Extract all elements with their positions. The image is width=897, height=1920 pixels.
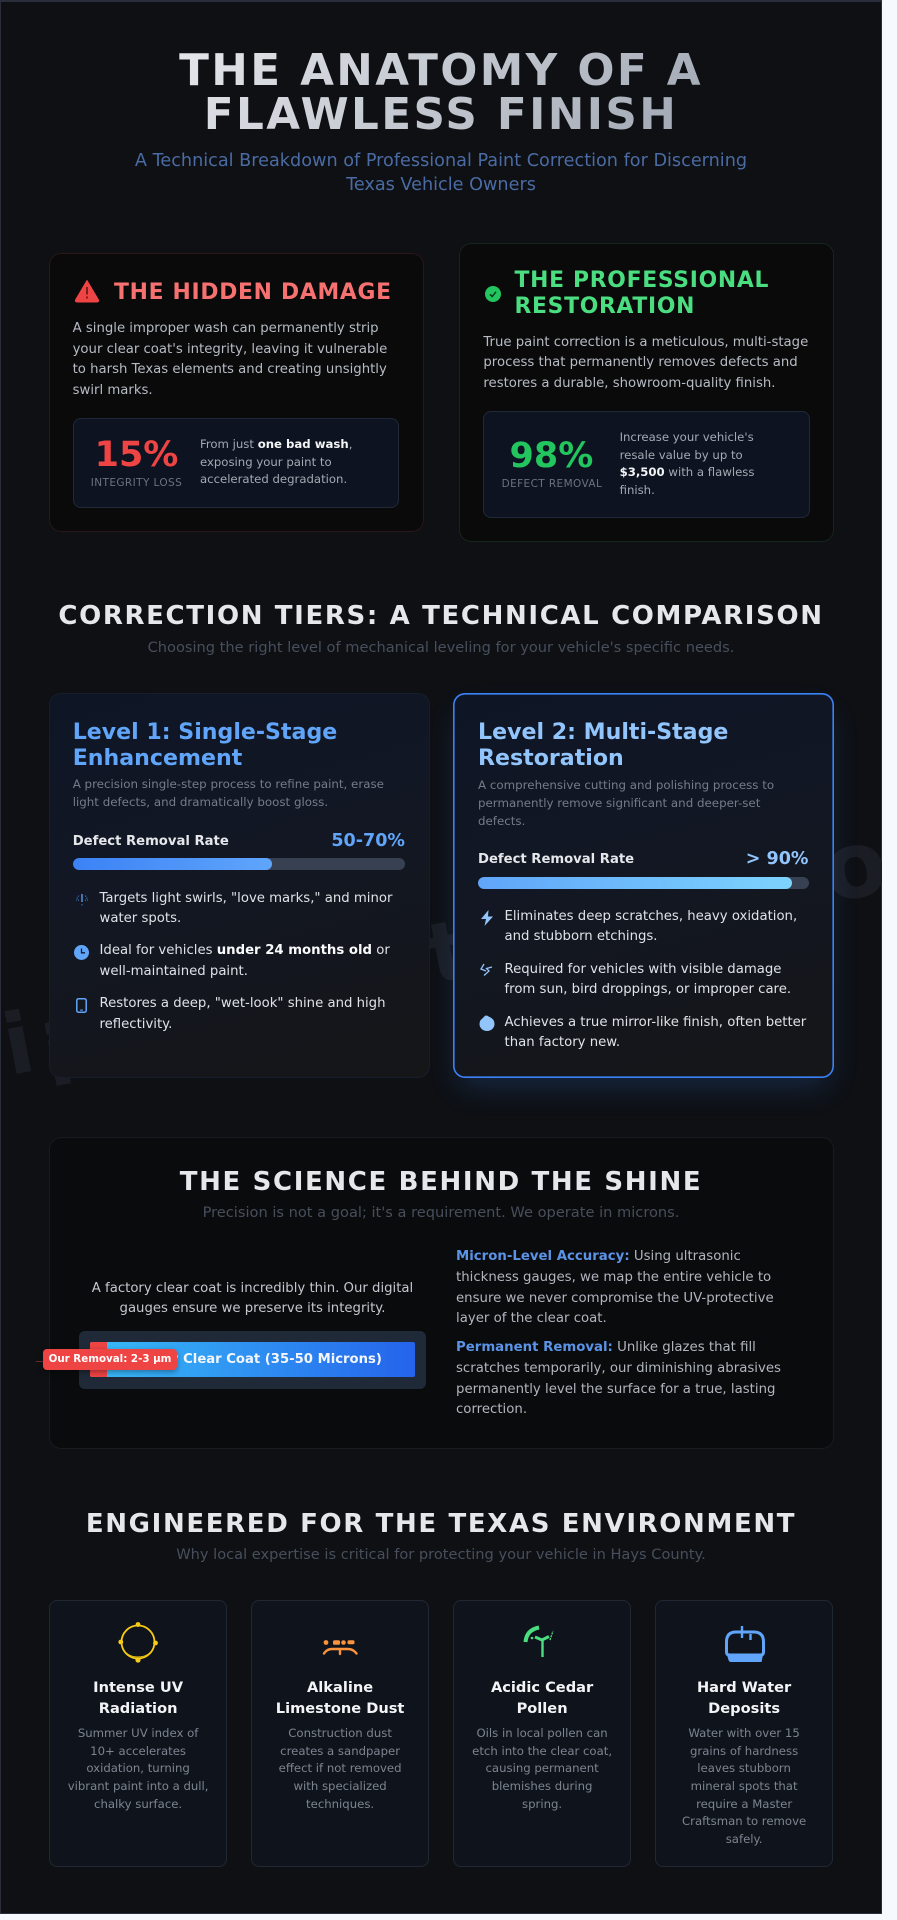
item text: than factory new. [504,1035,620,1050]
card text: mineral spots that [691,1779,798,1793]
card: limestone dust [251,1600,429,1867]
icon: pollen branch [524,1626,554,1657]
subheading: texas environment: Why local expertise is critical for protecting your vehicle in Hays County. [176,1546,706,1563]
item text [99,891,392,926]
panel: level 2 [453,693,834,1078]
card title: Intense UV [93,1679,183,1696]
icon: dust [322,1640,358,1656]
item text: Ideal for vehicles under 24 months old or [100,943,390,958]
icon: drop [480,1016,494,1031]
body text [483,335,808,391]
tier title: Restoration [478,745,624,771]
item text: Achieves a true mirror-like finish, often better [504,1015,806,1030]
tier description [478,778,774,828]
card title: Deposits [708,1700,780,1717]
card text: chalky surface. [94,1797,182,1811]
item text: Targets light swirls, "love marks," and minor [100,891,392,906]
tier description: light defects, and dramatically boost gloss. [73,795,328,809]
list item 3 [480,1015,806,1050]
heading: THE PROFESSIONAL [514,268,769,293]
stat text: $3,500 with a flawless [620,465,754,479]
item text: and stubborn etchings. [504,929,658,944]
tier description [72,777,384,809]
tier title: Level 1: Single-Stage [73,719,337,745]
stat value: 15% [95,435,178,475]
card text: safely. [726,1832,762,1846]
tier description: A precision single-step process to refine paint, erase [73,777,384,791]
card text: grains of hardness [690,1744,798,1758]
stat text: From just one bad wash, [200,437,352,451]
card text: vibrant paint into a dull, [68,1779,208,1793]
tier title: Level 2: Multi-Stage [478,719,728,745]
list item 1 [76,891,392,926]
stat text: Increase your vehicle's [620,430,754,444]
card: hard water [655,1600,833,1867]
icon: phone [76,998,87,1013]
card text [279,1726,402,1811]
card text [453,1725,631,1813]
subtitle: Texas Vehicle Owners [346,175,536,195]
card title: Limestone Dust [276,1700,404,1717]
card title [655,1678,833,1720]
removal strip [90,1342,107,1377]
icon: broken bolt [480,964,492,976]
gauge intro text [92,1281,413,1316]
card text: creates a sandpaper [280,1744,400,1758]
card text: with specialized [293,1779,387,1793]
card text: etch into the clear coat, [472,1744,612,1758]
item text [504,909,797,944]
item text: Restores a deep, "wet-look" shine and high [100,996,385,1011]
card title: Acidic Cedar [491,1679,593,1696]
heading: THE HIDDEN DAMAGE [114,280,392,305]
progress bar [478,877,808,889]
list item 3 [76,996,385,1032]
body text: True paint correction is a meticulous, multi-stage [483,335,808,350]
list item 2 [480,962,791,997]
icon: sparkle burst [76,894,88,906]
gauge intro text: gauges ensure we preserve its integrity. [120,1301,385,1316]
card text: oxidation, turning [86,1761,190,1775]
icon: warning triangle [74,280,100,302]
text: permanent removal: permanently level the surface for a true, lasting [456,1382,775,1397]
item text [100,943,390,979]
title: FLAWLESS FINISH [204,89,678,140]
tier title [73,719,337,771]
tier description: permanently remove significant and deeper-set [478,796,760,810]
item text: reflectivity. [100,1017,172,1032]
card title: Pollen [517,1700,568,1717]
text: micron-level accuracy: ensure we never compromise the UV-protective [456,1291,774,1306]
item text: Eliminates deep scratches, heavy oxidation, [504,909,797,924]
body text [72,321,387,398]
stat value: 98% [510,436,593,476]
rate label: Defect Removal Rate [478,852,634,867]
card: uv radiation [49,1600,227,1867]
gauge intro text: A factory clear coat is incredibly thin. Our digital [92,1281,413,1296]
stat text: finish. [620,483,655,497]
removal tag: Our Removal: 2-3 µm [49,1353,171,1365]
item text [504,1015,806,1050]
panel: the hidden damage [49,253,424,532]
clear coat gauge [79,1330,426,1389]
subtitle [135,151,747,195]
list item 1 [481,909,797,944]
icon: bolt [481,910,493,926]
item text: water spots. [100,911,181,926]
card text [68,1726,208,1811]
card text: causing permanent [485,1761,599,1775]
text: micron-level accuracy: layer of the clear coat. [456,1311,607,1326]
stat box [483,411,810,518]
card title: Radiation [99,1700,177,1717]
stat label: INTEGRITY LOSS [91,476,182,488]
list item 2 [74,943,390,979]
panel: the professional restoration [459,243,834,542]
icon: sun ring [118,1622,158,1663]
tier description: A comprehensive cutting and polishing process to [478,778,774,792]
icon: check circle [485,286,501,302]
heading: texas environment: ENGINEERED FOR THE TEXAS ENVIRONMENT [86,1509,796,1539]
card text: Water with over 15 [688,1726,800,1740]
text: permanent removal [456,1340,781,1417]
item text [504,962,791,997]
card text: leaves stubborn [697,1761,791,1775]
icon: water tank [724,1620,766,1664]
stat box [73,418,399,508]
stat text: exposing your paint to [200,455,332,469]
watermark letters: i [35,1005,82,1107]
progress bar [73,858,405,870]
item text: from sun, bird droppings, or improper care. [504,982,791,997]
body text: your clear coat's integrity, leaving it vulnerable [73,342,387,357]
heading [514,268,769,319]
clear coat bar [90,1342,415,1377]
title: THE ANATOMY OF A [179,45,703,96]
card text: Oils in local pollen can [476,1726,608,1740]
text: permanent removal: scratches temporarily, our diminishing abrasives [456,1361,781,1376]
stat text: resale value by up to [620,448,743,462]
stat text [200,437,352,486]
rate value: 50-70% [331,831,405,851]
card text: Summer UV index of [78,1726,198,1740]
card text: 10+ accelerates [90,1744,186,1758]
card: cedar pollen [453,1600,631,1867]
title [141,49,741,138]
rate value: > 90% [746,849,808,869]
text: permanent removal: correction. [456,1402,527,1417]
card text: Construction dust [288,1726,392,1740]
panel: the science behind the shine [49,1137,834,1449]
removal tag [43,1349,177,1370]
text: micron-level accuracy [456,1249,774,1326]
body text: to harsh Texas elements and creating unsightly [73,362,387,377]
text: micron-level accuracy: Micron-Level Accuracy: Using ultrasonic [456,1249,741,1264]
stat text: accelerated degradation. [200,472,347,486]
rate label: Defect Removal Rate [73,834,229,849]
card text: require a Master [696,1797,792,1811]
subtitle: A Technical Breakdown of Professional Paint Correction for Discerning [135,151,747,171]
icon: clock [74,945,89,960]
heading: correction tiers: CORRECTION TIERS: A TECHNICAL COMPARISON [58,601,824,631]
card title [276,1679,404,1717]
card text: techniques. [306,1797,374,1811]
subheading: correction tiers: Choosing the right level of mechanical leveling for your vehicle's specific needs. [148,638,734,656]
card text: Craftsman to remove [682,1814,806,1828]
subheading: Precision is not a goal; it's a requirement. We operate in microns. [203,1204,679,1221]
card title [93,1679,183,1717]
item text [100,996,385,1032]
body text: A single improper wash can permanently strip [73,321,379,336]
card title: Alkaline [307,1679,373,1696]
card title [453,1678,631,1720]
stat text [620,430,754,497]
item text: well-maintained paint. [100,964,248,979]
tick mark [36,1360,43,1362]
panel: level 1 [49,693,430,1078]
body text: process that permanently removes defects and [483,355,798,370]
item text: Required for vehicles with visible damage [504,962,781,977]
clear coat bar: Factory Clear Coat (35-50 Microns) [123,1352,382,1367]
text: permanent removal: Permanent Removal: Unlike glazes that fill [456,1340,756,1355]
heading: THE SCIENCE BEHIND THE SHINE [180,1167,702,1197]
card title: Hard Water [697,1679,791,1696]
heading: RESTORATION [514,294,695,319]
body text: swirl marks. [73,383,153,398]
tier description: defects. [478,814,525,828]
body text: restores a durable, showroom-quality finish. [483,376,775,391]
text: micron-level accuracy: thickness gauges, we map the entire vehicle to [456,1270,771,1285]
tier title [478,719,728,771]
card text: effect if not removed [279,1761,402,1775]
card text [655,1725,833,1849]
card text: spring. [522,1797,562,1811]
tier title: Enhancement [73,745,242,771]
card text: blemishes during [492,1779,592,1793]
watermark letters: t [419,900,477,1004]
stat label: DEFECT REMOVAL [502,478,602,490]
